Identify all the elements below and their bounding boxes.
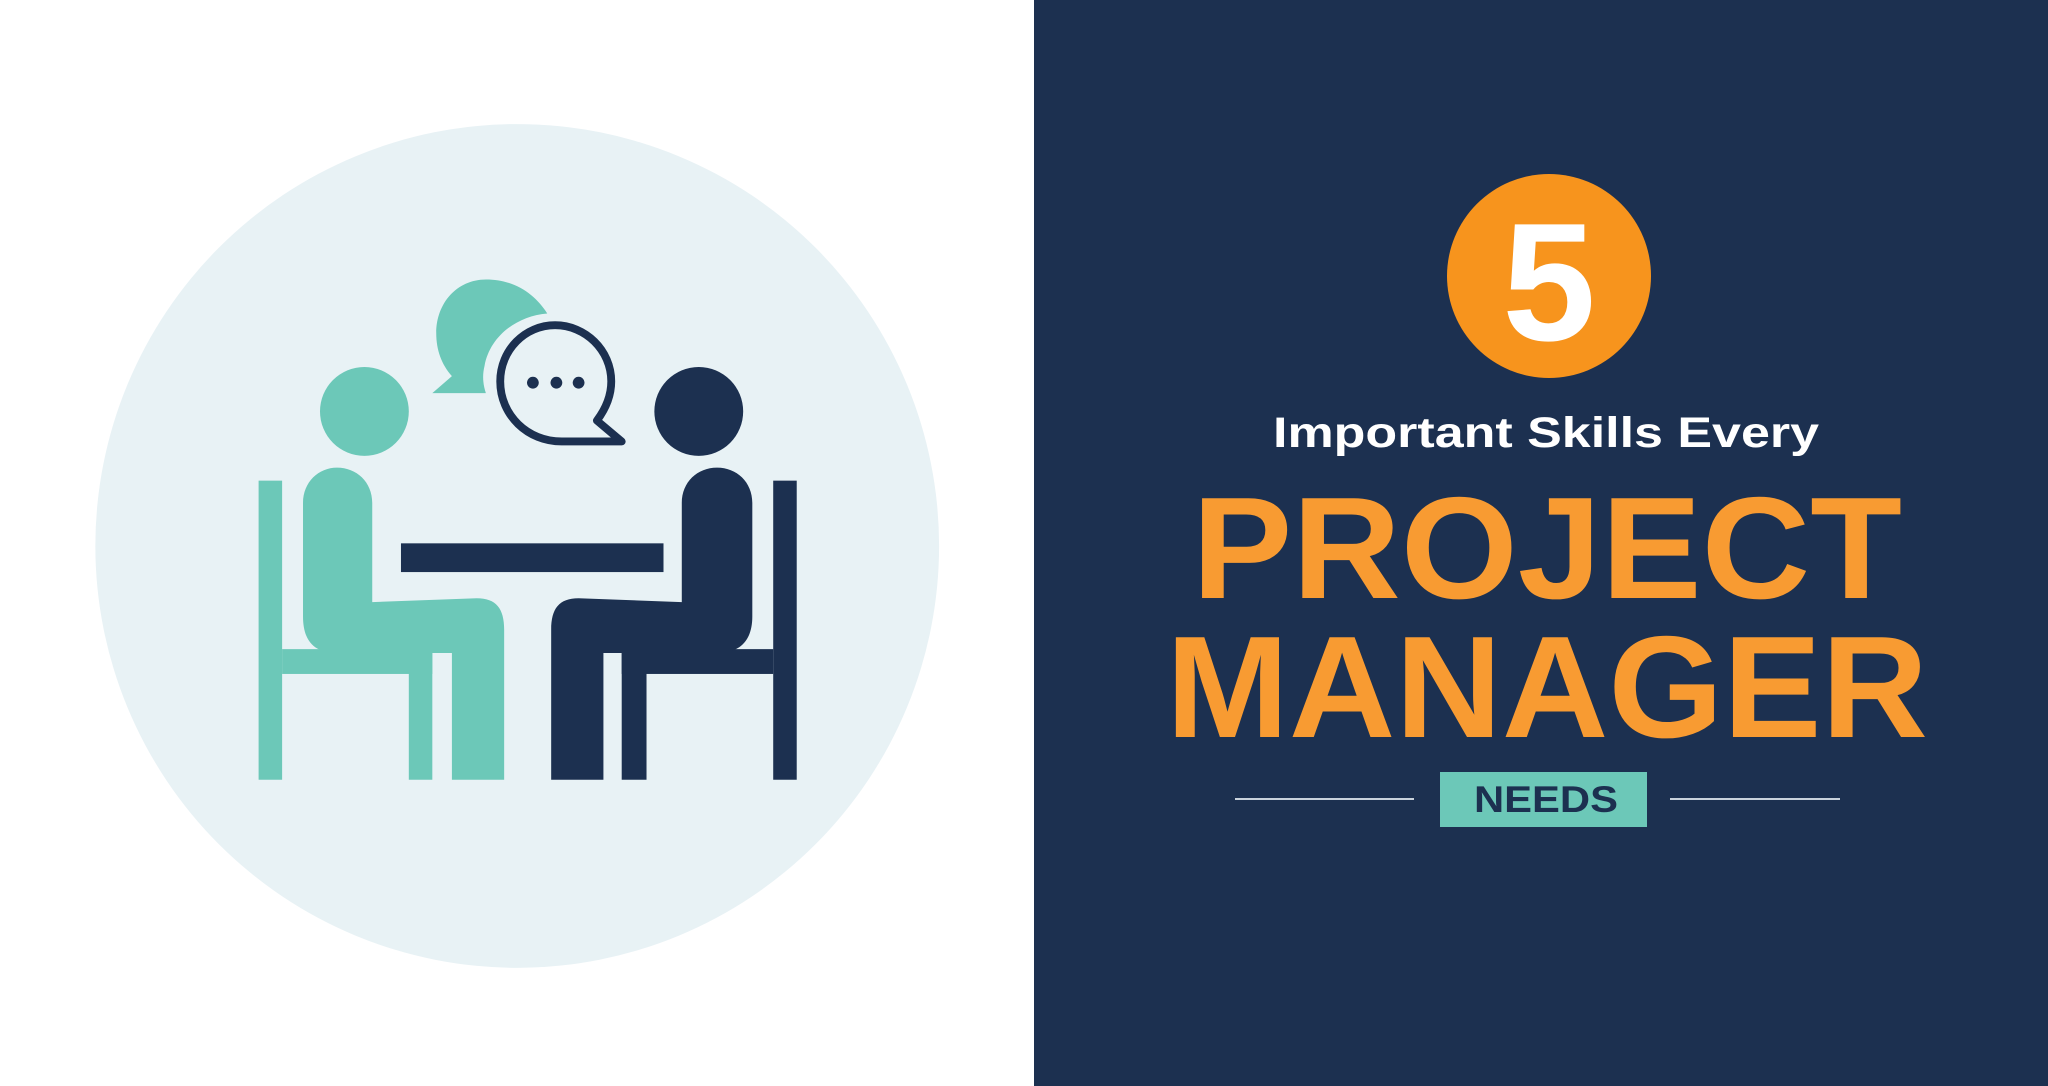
icon: navy outlined speech bubble [500, 325, 622, 441]
icon: teal person on chair [259, 367, 504, 780]
heading: PROJECT: PROJECT [1192, 467, 1902, 629]
heading: MANAGER: MANAGER [1166, 606, 1928, 768]
icon: teal speech bubble [432, 280, 547, 393]
NEEDS label [1235, 772, 1840, 827]
badge: number 5 [1447, 174, 1651, 378]
table [401, 543, 663, 572]
badge: number 5: 5 [1502, 188, 1596, 376]
NEEDS label: NEEDS [1474, 779, 1618, 820]
icon: navy person on chair [551, 367, 797, 780]
background circle [95, 124, 939, 968]
left panel: illustration [0, 0, 1034, 1086]
subtitle: Important Skills Every [1273, 409, 1819, 457]
right panel: title [1034, 0, 2048, 1086]
